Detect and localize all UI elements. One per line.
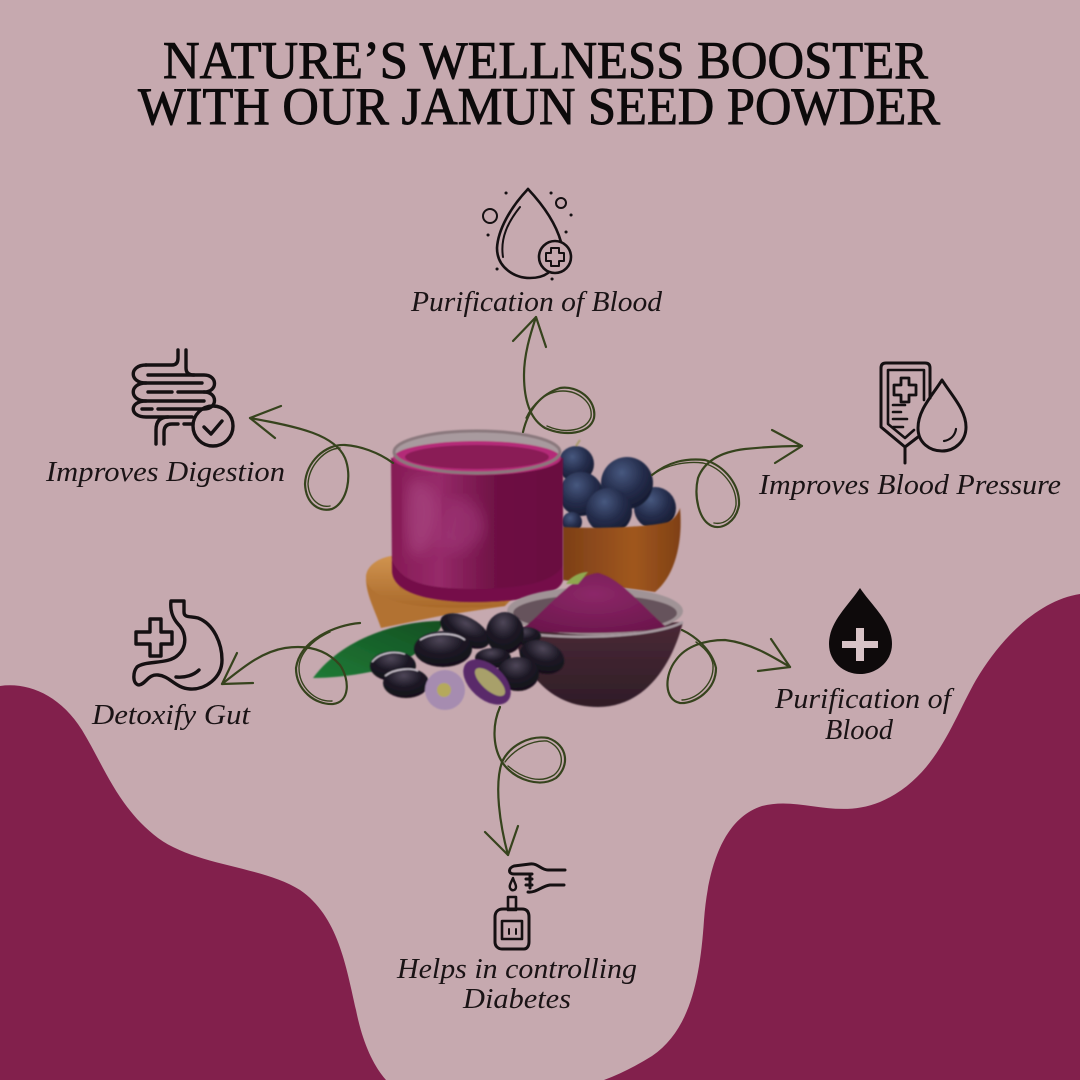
icon: blood drop with plus — [483, 189, 571, 279]
label: Detoxify Gut — [91, 699, 251, 731]
benefit: purification of blood (right): Blood — [825, 714, 893, 746]
benefit: purification of blood (top) — [410, 189, 662, 318]
blue berries — [558, 440, 676, 534]
label: Helps in controlling — [396, 953, 637, 985]
label: Improves Blood Pressure — [758, 469, 1061, 501]
benefit: helps in controlling diabetes: Diabetes — [462, 983, 571, 1015]
title: WITH OUR JAMUN SEED POWDER — [138, 78, 941, 136]
arrow: to blood pressure — [652, 430, 802, 527]
arrow: to diabetes — [485, 707, 565, 855]
wooden bowl — [563, 508, 681, 592]
icon: stomach with plus — [134, 601, 222, 689]
arrow: to detoxify gut — [222, 623, 360, 704]
arrow: to digestion — [250, 406, 393, 510]
green leaf — [313, 621, 444, 678]
benefit: helps in controlling diabetes — [396, 864, 637, 1015]
icon: solid drop with plus — [829, 588, 892, 674]
wooden plate — [366, 556, 520, 628]
jamun fruits — [370, 606, 569, 713]
title: NATURE’S WELLNESS BOOSTER — [163, 32, 929, 90]
label: Purification of — [774, 683, 955, 715]
benefit: improves blood pressure — [758, 363, 1061, 501]
title — [138, 32, 941, 136]
central product photo — [313, 431, 683, 713]
icon: intestines with check — [133, 350, 233, 446]
benefit: purification of blood (right) — [774, 588, 955, 746]
arrow: to purification of blood (top) — [513, 317, 594, 433]
arrow: to purification of blood (right) — [667, 630, 790, 703]
wave: bottom right — [604, 594, 1080, 1080]
label: Purification of Blood — [410, 286, 662, 318]
benefit: improves digestion — [45, 350, 285, 488]
label: Improves Digestion — [45, 456, 285, 488]
icon: glucose meter with finger — [495, 864, 565, 949]
glass of juice — [391, 431, 563, 602]
powder bowl — [507, 572, 683, 707]
benefit: detoxify gut — [91, 601, 251, 731]
icon: blood bag with drop — [881, 363, 966, 463]
wave: bottom left — [0, 685, 386, 1080]
